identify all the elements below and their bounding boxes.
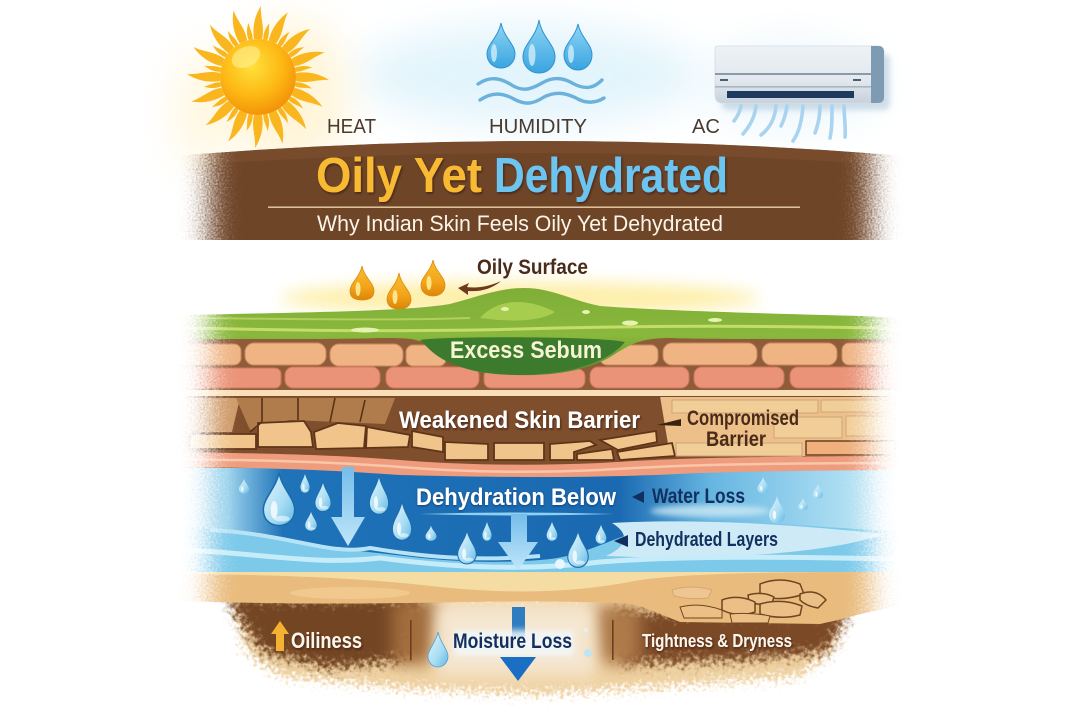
title word: dehydrated: Dehydrated bbox=[494, 149, 728, 203]
icon: humidity drops and waves bbox=[478, 20, 604, 103]
callout: water loss: Water Loss bbox=[652, 485, 745, 508]
panel: cream strip bbox=[187, 390, 893, 396]
background glow bbox=[175, 20, 880, 314]
panel: barrier layer bbox=[185, 397, 896, 461]
panel: sand layer bbox=[182, 572, 901, 624]
arrow: water down centre bbox=[420, 512, 614, 570]
arrow: water down left bbox=[331, 467, 365, 546]
icon: air conditioner bbox=[715, 46, 890, 141]
panel: bottom soil band bbox=[226, 596, 850, 694]
summary: oiliness bbox=[271, 621, 362, 653]
label: excess sebum: Excess Sebum bbox=[450, 337, 602, 364]
panel: brick mortar bbox=[150, 338, 930, 390]
divider left bbox=[410, 620, 412, 660]
label: ac: AC bbox=[692, 116, 720, 138]
panel: barrier base bbox=[182, 397, 868, 468]
water droplets bbox=[239, 473, 823, 569]
panel: cracked sand patch bbox=[672, 580, 826, 623]
panel: water layer bbox=[183, 468, 899, 572]
summary: oiliness: Oiliness bbox=[291, 628, 362, 653]
oil droplets bbox=[350, 260, 445, 309]
summary: tightness and dryness: Tightness & Dryness bbox=[642, 631, 792, 651]
panel: upper bricks bbox=[160, 343, 922, 366]
icon: sun bbox=[187, 6, 329, 148]
callout: compromised barrier: Compromised bbox=[687, 407, 799, 430]
subtitle: Why Indian Skin Feels Oily Yet Dehydrated bbox=[317, 211, 723, 236]
label: humidity: HUMIDITY bbox=[489, 116, 587, 138]
label: heat: HEAT bbox=[327, 116, 376, 138]
summary: moisture loss: Moisture Loss bbox=[453, 630, 572, 653]
panel: lower bricks bbox=[160, 367, 920, 388]
main title: Oily Yet bbox=[316, 149, 482, 203]
label: weakened skin barrier: Weakened Skin Barrier bbox=[399, 407, 640, 434]
label: oily surface bbox=[458, 256, 588, 295]
label: oily surface: Oily Surface bbox=[477, 256, 588, 279]
arrow: oily surface pointer bbox=[458, 281, 501, 295]
callout: compromised barrier: Barrier bbox=[706, 428, 766, 451]
skin layers stack bbox=[150, 288, 930, 694]
summary: moisture loss bbox=[428, 607, 592, 681]
callout: compromised barrier bbox=[657, 407, 799, 451]
divider right bbox=[612, 620, 614, 660]
title banner bbox=[150, 141, 930, 240]
panel: pink strip bbox=[184, 452, 896, 477]
callout: dehydrated layers: Dehydrated Layers bbox=[635, 529, 778, 551]
panel: sebum layer bbox=[150, 288, 930, 375]
divider line bbox=[268, 206, 800, 208]
label: dehydration below: Dehydration Below bbox=[416, 484, 616, 511]
